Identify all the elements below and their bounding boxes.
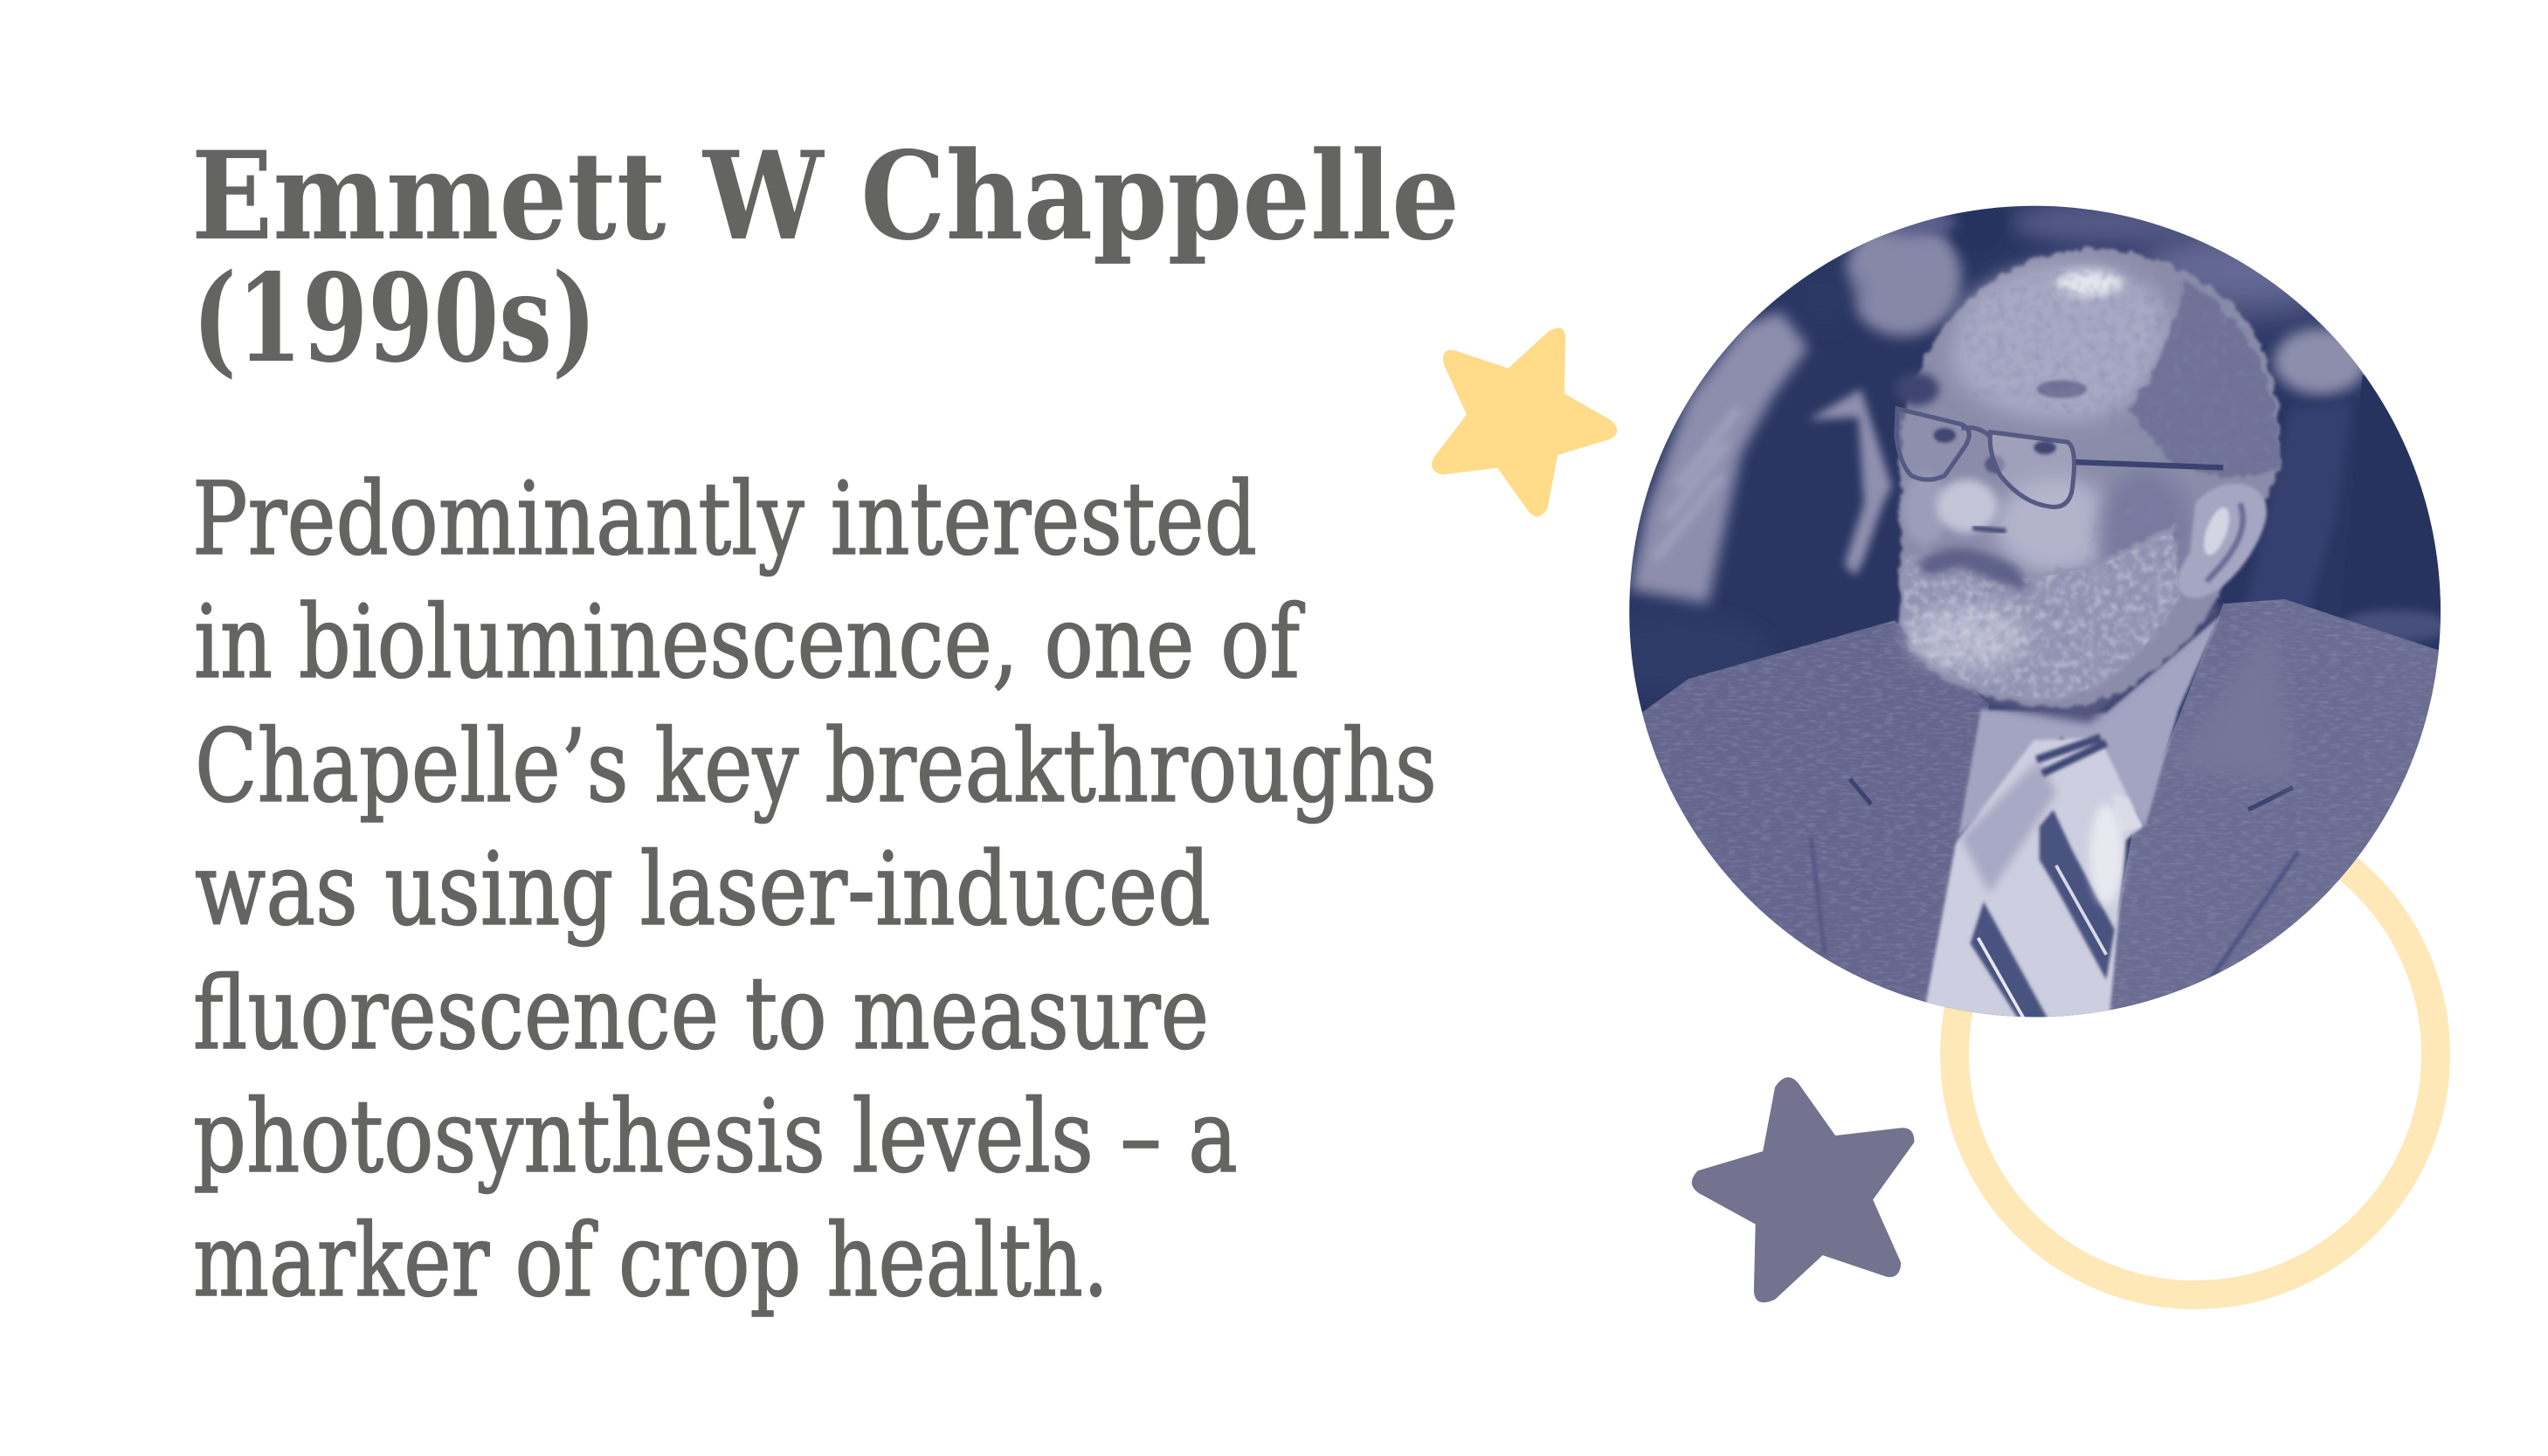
yellow star bbox=[1432, 328, 1617, 516]
head bbox=[1895, 249, 2280, 707]
ear bbox=[2178, 484, 2267, 598]
title: Emmett W Chappelle bbox=[191, 124, 1460, 267]
photo background crowd bbox=[1583, 200, 2469, 693]
body text: photosynthesis levels – a bbox=[193, 1079, 1238, 1196]
body text: in bioluminescence, one of bbox=[194, 584, 1305, 701]
purple star bbox=[1692, 1077, 1914, 1302]
body text: Predominantly interested bbox=[192, 461, 1257, 578]
body text: marker of crop health. bbox=[193, 1203, 1108, 1320]
portrait photo bbox=[1629, 206, 2441, 1017]
neck shadow bbox=[1978, 587, 2223, 723]
eyeglasses bbox=[1896, 409, 2223, 507]
raised arm bbox=[1630, 311, 1808, 604]
title: (1990s) bbox=[192, 246, 597, 390]
body text: was using laser-induced bbox=[195, 832, 1211, 949]
necktie bbox=[1923, 737, 2143, 1021]
title bbox=[191, 124, 1460, 390]
beard and moustache bbox=[1900, 526, 2181, 701]
suit jacket bbox=[1639, 599, 2446, 1044]
body text: fluorescence to measure bbox=[193, 956, 1209, 1073]
body text: Chapelle’s key breakthroughs bbox=[195, 708, 1437, 825]
shirt collar bbox=[1958, 615, 2220, 835]
body text bbox=[192, 461, 1437, 1320]
woman in background bbox=[1789, 186, 2006, 576]
decorative ring bbox=[1955, 814, 2435, 1294]
